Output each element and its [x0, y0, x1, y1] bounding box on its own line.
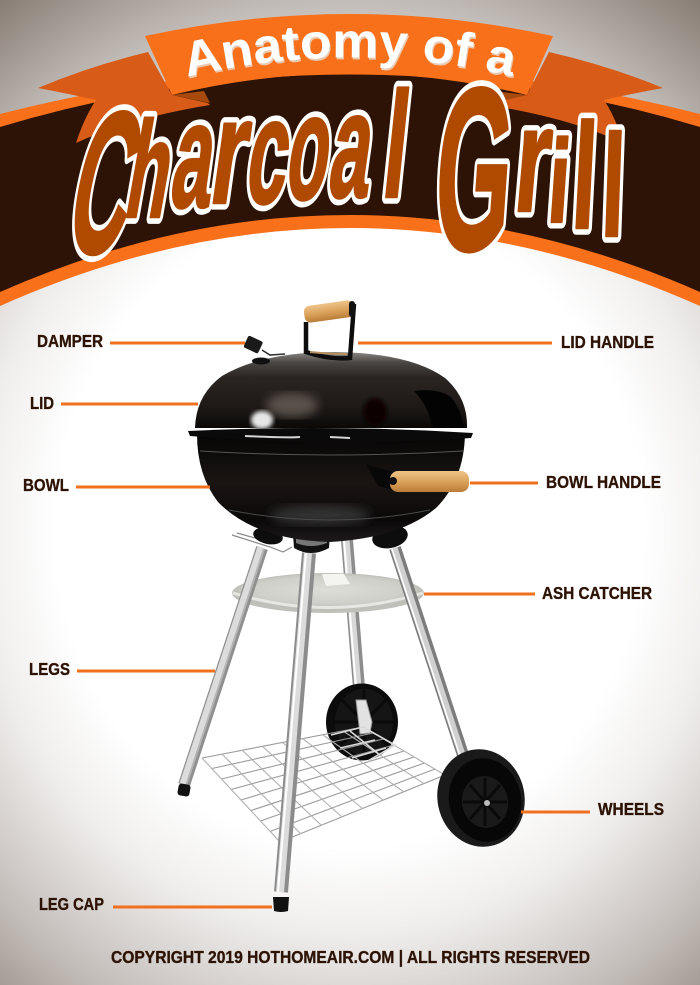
front leg and cap	[273, 553, 309, 912]
rack: wire grid	[202, 727, 445, 842]
label: bowl: BOWL	[23, 475, 69, 495]
left leg	[177, 547, 264, 797]
label: legs: LEGS	[29, 659, 70, 679]
heading: Charcoal Grill: a	[163, 73, 228, 240]
lid	[195, 352, 467, 429]
label: bowl handle: BOWL HANDLE	[546, 472, 661, 492]
heading: Charcoal Grill: l	[377, 60, 417, 229]
heading: Charcoal Grill: l	[568, 94, 601, 261]
front wheel	[428, 741, 534, 855]
bowl	[197, 434, 465, 542]
heading: Charcoal Grill: i	[544, 117, 575, 248]
heading: Charcoal Grill: a	[321, 63, 386, 230]
heading: Charcoal Grill: o	[279, 63, 343, 231]
label: lid: LID	[30, 393, 54, 413]
label: lid handle: LID HANDLE	[561, 332, 654, 352]
heading: Charcoal Grill: r	[202, 68, 261, 236]
heading: Charcoal Grill: G	[428, 39, 522, 299]
illustration: charcoal grill	[177, 300, 534, 912]
banner: dark arc band	[0, 69, 700, 306]
label: leg cap: LEG CAP	[39, 894, 104, 914]
label: damper: DAMPER	[37, 331, 103, 351]
right leg	[392, 548, 463, 756]
heading: Charcoal Grill: C	[53, 70, 160, 297]
label: ash catcher: ASH CATCHER	[542, 583, 652, 603]
heading: Charcoal Grill: l	[599, 106, 628, 268]
heading: Charcoal Grill: r	[202, 68, 261, 236]
heading: Charcoal Grill: i	[544, 117, 575, 248]
heading: Anatomy of a	[188, 28, 514, 78]
heading: Charcoal Grill: c	[238, 69, 302, 236]
footer: copyright: COPYRIGHT 2019 HOTHOMEAIR.COM | ALL RIGHTS RESERVED	[111, 947, 590, 967]
heading: Charcoal Grill: h	[117, 95, 185, 247]
foot knobs	[252, 522, 410, 553]
bowl handle	[366, 464, 469, 492]
ash catcher	[232, 573, 424, 613]
lid handle	[303, 300, 355, 358]
heading: Anatomy of a: Anatomy of a	[188, 28, 514, 78]
heading: Charcoal Grill: l	[377, 60, 417, 229]
back leg	[344, 540, 362, 725]
heading: Charcoal Grill: l	[568, 94, 601, 261]
lid rim	[188, 428, 473, 443]
damper	[243, 335, 285, 364]
heading: Charcoal Grill: l	[599, 106, 628, 268]
heading: Charcoal Grill: C	[53, 70, 160, 297]
heading: Charcoal Grill: G	[428, 39, 522, 299]
heading: Charcoal Grill: a	[321, 63, 386, 230]
heading: Charcoal Grill: h	[117, 95, 185, 247]
wire hook	[232, 533, 292, 552]
label: wheels: WHEELS	[598, 799, 664, 819]
heading: Charcoal Grill: r	[509, 77, 559, 244]
heading: Charcoal Grill: c	[238, 69, 302, 236]
back wheel	[326, 684, 398, 760]
heading: Charcoal Grill: o	[279, 63, 343, 231]
ribbon: orange title banner	[38, 14, 663, 143]
heading: Charcoal Grill: a	[163, 73, 228, 240]
heading: Charcoal Grill	[53, 39, 628, 299]
heading: Charcoal Grill: r	[509, 77, 559, 244]
